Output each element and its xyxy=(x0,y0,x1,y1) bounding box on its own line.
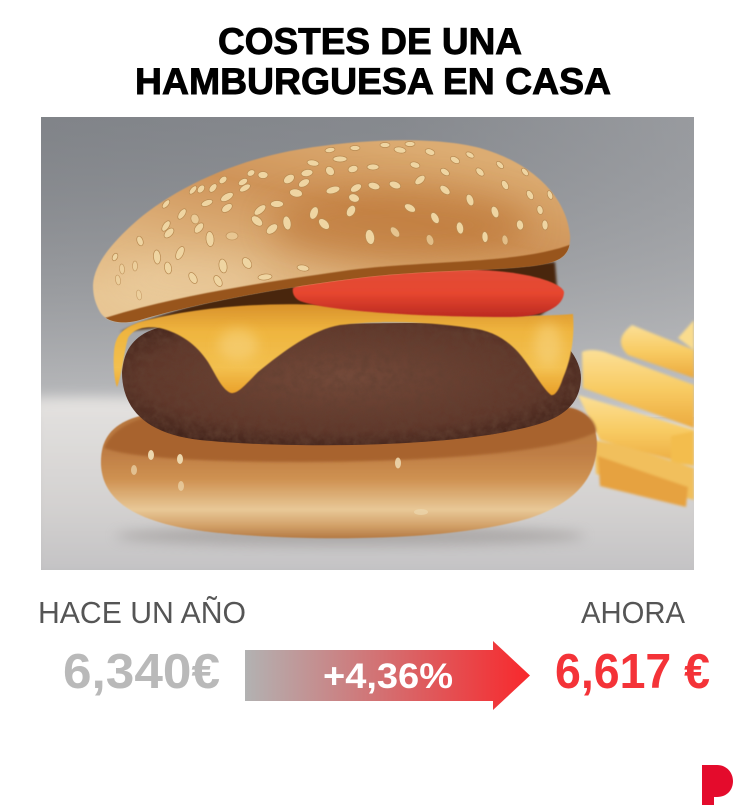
cheese xyxy=(114,304,573,395)
fries xyxy=(578,320,694,507)
cheese highlights xyxy=(218,323,562,367)
label: hace un año: HACE UN AÑO xyxy=(38,595,246,630)
title: COSTES DE UNA xyxy=(218,21,522,62)
label: ahora: AHORA xyxy=(581,595,685,630)
logo xyxy=(702,765,733,805)
patty xyxy=(122,322,581,445)
title xyxy=(135,21,611,102)
sesame seeds xyxy=(111,142,554,300)
shadow under top bun xyxy=(120,262,558,332)
photo: hamburger with fries xyxy=(31,117,704,580)
value: current price: 6,617 € xyxy=(555,645,710,699)
tomato xyxy=(293,270,564,317)
title: HAMBURGUESA EN CASA xyxy=(135,61,611,102)
top bun xyxy=(93,140,572,330)
arrow with percentage: +4,36% xyxy=(323,657,453,696)
arrow with percentage xyxy=(245,641,530,710)
bottom bun xyxy=(101,408,597,546)
bottom bun seeds xyxy=(131,450,428,515)
bottom bun cut face xyxy=(104,408,596,462)
value: price one year ago: 6,340€ xyxy=(63,645,220,699)
